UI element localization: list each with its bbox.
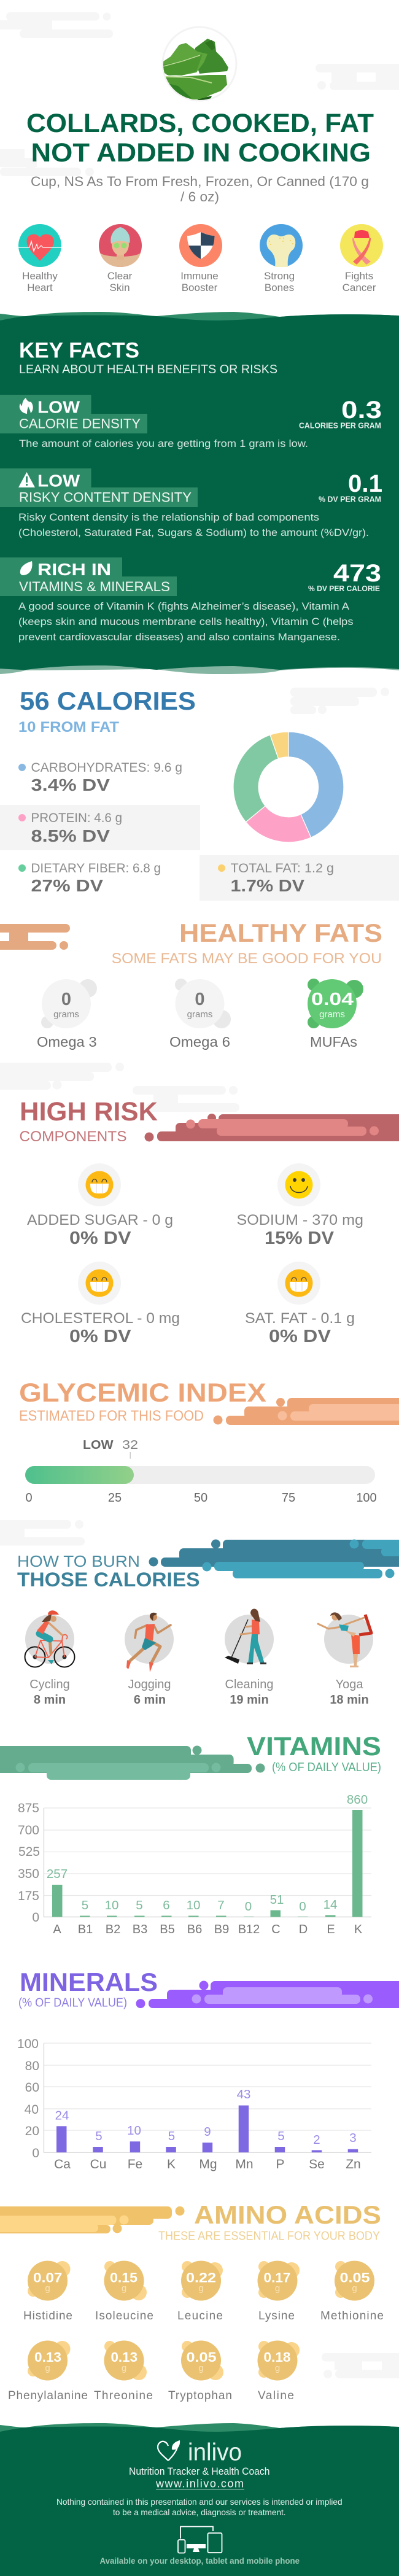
activity: yoga: Yoga [336,1678,363,1691]
glycemic gauge: 25 [108,1491,122,1505]
heading: amino acids: THESE ARE ESSENTIAL FOR YOUR BODY [158,2229,380,2243]
heading: healthy fats: HEALTHY FATS [179,918,382,947]
fact: low risky content density: LOW [37,471,80,490]
heading: how to burn those calories [17,1552,200,1591]
bar chart: minerals: 0 [32,2146,39,2160]
benefit: healthy heart: Heart [27,282,53,293]
decorative blob: burn [0,1520,85,1546]
bar chart: vitamins: E [327,1923,335,1936]
risk item: saturated fat [245,1262,355,1346]
decorative background blobs: header [0,12,399,176]
amino: tryptophan [168,2340,232,2402]
benefit: clear skin: Clear [107,270,133,282]
bar chart: minerals: 20 [25,2124,39,2138]
amino: isoleucine: 0.15 [110,2270,138,2285]
logo: inlivo: inlivo [188,2438,242,2465]
fat bubble: omega 3 [37,979,97,1050]
macro: protein: PROTEIN: 4.6 g [31,811,122,825]
risk item: sodium: 15% DV [265,1228,335,1248]
fact: rich in vitamins and minerals [0,557,381,643]
decorative banner: amino acids [0,2206,184,2233]
bar chart: vitamins: B3 [133,1923,147,1936]
amino: histidine [23,2260,72,2322]
activity: jogging: Jogging [128,1678,171,1691]
fact: low risky content density: RISKY CONTENT DENSITY [19,490,192,505]
fat bubble: omega 6: Omega 6 [169,1034,230,1050]
decorative banner: burn [149,1540,399,1578]
bar chart: minerals [17,2037,371,2171]
decorative blob: healthy fats [0,924,70,950]
fat bubble: MUFAs: 0.04 [311,990,354,1009]
bar chart: vitamins: 5 [82,1898,88,1912]
amino: methionine: g [352,2283,357,2294]
bar chart: minerals: Cu [90,2157,106,2171]
heading: glycemic index: GLYCEMIC INDEX [19,1378,266,1408]
bar chart: vitamins: 875 [18,1801,39,1815]
benefit: fights cancer [340,224,383,293]
heading: calories [18,686,196,735]
heading: amino acids: AMINO ACIDS [194,2200,381,2229]
bar chart: minerals: 3 [349,2131,357,2145]
amino: isoleucine: g [122,2283,126,2294]
heading: calories: 56 CALORIES [20,686,196,715]
bar chart: vitamins: 7 [217,1898,225,1912]
risk item: saturated fat: SAT. FAT - 0.1 g [245,1310,355,1327]
activity: cycling: Cycling [29,1678,70,1691]
title: NOT ADDED IN COOKING [31,138,371,168]
benefit: strong bones: Strong [264,270,295,282]
footer disclaimer: to be a medical advice, diagnosis or treatment. [113,2507,286,2517]
activity: yoga [318,1612,373,1707]
amino: leucine: 0.22 [186,2270,216,2285]
amino: phenylalanine [8,2340,88,2402]
bar chart: vitamins: 14 [323,1898,337,1912]
risk item: added sugar: ADDED SUGAR - 0 g [27,1212,173,1228]
amino: isoleucine: Isoleucine [95,2310,153,2322]
activity: cycling: 8 min [34,1693,66,1707]
macro: total fat: 1.7% DV [231,876,304,895]
heading: key facts [19,339,277,376]
footer tagline and link: Nutrition Tracker & Health Coach [129,2466,270,2477]
bar chart: vitamins: D [299,1923,308,1936]
risk item: sodium: SODIUM - 370 mg [237,1212,363,1228]
bar chart: minerals: Fe [128,2157,142,2171]
bar chart: minerals: Zn [346,2157,361,2171]
bar chart: vitamins: 51 [270,1893,284,1907]
fact: low calorie density: LOW [37,398,80,416]
fat bubble: omega 6 [169,979,231,1050]
activity: yoga: 18 min [330,1693,369,1707]
activity: jogging: 6 min [134,1693,166,1707]
fat bubble: omega 6: 0 [195,990,205,1009]
title [26,109,374,168]
risk item: added sugar [27,1163,173,1248]
serving size subtitle: / 6 oz) [180,189,219,204]
panel: footer background [0,2423,399,2576]
serving size subtitle [31,174,369,204]
bar chart: minerals: 5 [168,2129,175,2143]
footer tagline and link [129,2466,270,2490]
bar chart: vitamins: 10 [105,1898,118,1912]
bar chart: vitamins: 0 [245,1899,252,1914]
amino: methionine: 0.05 [340,2270,370,2285]
decorative blobs: high risk [0,1063,239,1112]
activity: cleaning [225,1608,274,1707]
bar chart: minerals: 9 [204,2125,211,2139]
amino: tryptophan: 0.05 [187,2349,216,2365]
amino: threonine: Threonine [94,2389,153,2402]
bar chart: vitamins: B9 [214,1923,229,1936]
bar chart: vitamins: 6 [163,1898,170,1912]
bar chart: minerals: Mn [235,2157,254,2171]
donut chart: calorie breakdown [233,732,344,842]
fact: rich in vitamins and minerals: prevent cardiovascular diseases) and also contains Manganese. [18,632,340,643]
amino: threonine: 0.13 [110,2349,138,2365]
bar chart: minerals: 43 [237,2087,250,2101]
bar chart: minerals: Ca [54,2157,71,2171]
bar chart: minerals: 60 [25,2081,39,2095]
glycemic gauge [25,1438,377,1505]
risk item: cholesterol [21,1262,180,1346]
decorative banner: minerals [136,1980,399,2008]
glycemic gauge: 32 [122,1438,138,1452]
macro: dietary fiber: DIETARY FIBER: 6.8 g [31,861,161,875]
fat bubble: MUFAs [308,979,363,1050]
fact: low calorie density: 0.3 [341,397,382,424]
macro: carbohydrates [18,761,182,794]
heading: minerals [18,1968,158,2010]
panel: key facts background [0,312,399,674]
bar chart: vitamins: B2 [106,1923,120,1936]
macro: total fat [200,855,399,901]
heading: vitamins [247,1732,381,1774]
amino: valine: 0.18 [264,2349,291,2365]
fat bubble: omega 3: 0 [61,990,71,1009]
logo: inlivo [158,2438,242,2465]
serving size subtitle: Cup, NS As To From Fresh, Frozen, Or Canned (170 g [31,174,369,189]
bar chart: vitamins: A [53,1923,61,1936]
icon: devices [178,2527,222,2553]
amino: threonine [94,2340,153,2402]
benefit: fights cancer: Cancer [343,282,376,293]
benefit: clear skin [99,224,142,293]
heading: high risk: HIGH RISK [20,1097,158,1127]
amino: lysine: Lysine [258,2310,295,2322]
amino: methionine: Methionine [320,2310,384,2322]
fat bubble: MUFAs: grams [319,1009,345,1020]
decorative banner: vitamins [0,1746,265,1780]
heading: key facts: LEARN ABOUT HEALTH BENEFITS OR RISKS [19,363,277,376]
heading: healthy fats: SOME FATS MAY BE GOOD FOR YOU [112,950,382,967]
heading: glycemic index: ESTIMATED FOR THIS FOOD [19,1408,204,1424]
glycemic gauge: 75 [282,1491,295,1505]
amino: tryptophan: Tryptophan [168,2389,232,2402]
risk item: saturated fat: 0% DV [269,1327,331,1346]
footer availability note: Available on your desktop, tablet and mobile phone [99,2556,300,2566]
amino: phenylalanine: Phenylalanine [8,2389,88,2402]
heading: vitamins: VITAMINS [247,1732,381,1761]
fact: low risky content density: Risky Content density is the relationship of bad components [18,512,319,523]
bar chart: vitamins: 860 [347,1793,368,1807]
heading: high risk [20,1097,158,1145]
heading: amino acids [158,2200,381,2243]
amino: phenylalanine: 0.13 [34,2349,61,2365]
bar chart: minerals: Se [309,2157,325,2171]
amino: valine: Valine [258,2389,294,2402]
fat bubble: omega 6: grams [187,1009,212,1020]
fact: rich in vitamins and minerals: VITAMINS & MINERALS [19,579,170,594]
decorative banner: high risk [145,1114,399,1142]
fat bubble: MUFAs: MUFAs [310,1034,357,1050]
benefit: healthy heart: Healthy [22,270,58,282]
macro: protein [0,805,200,850]
amino: isoleucine [95,2260,153,2322]
amino: leucine [177,2260,223,2322]
activity: jogging [125,1613,174,1707]
bar chart: vitamins: 700 [18,1823,39,1837]
macro: carbohydrates: 3.4% DV [31,775,110,794]
risk item: cholesterol: 0% DV [69,1327,131,1346]
bar chart: minerals: 80 [25,2059,39,2073]
benefit: fights cancer: Fights [345,270,373,282]
bar chart: vitamins: 5 [136,1898,143,1912]
fact: rich in vitamins and minerals: (keeps skin and mucous membrane cells healthy), Vitamin C (helps [18,616,354,627]
risk item: sodium [237,1163,363,1248]
title: COLLARDS, COOKED, FAT [26,109,374,138]
fact: rich in vitamins and minerals: 473 [333,560,381,587]
amino: tryptophan: g [198,2363,204,2373]
bar chart: vitamins [18,1793,371,1936]
bar chart: vitamins: 175 [18,1889,39,1903]
bar chart: vitamins: 10 [187,1898,200,1912]
bar chart: vitamins: 257 [47,1867,68,1881]
decorative blob: lower right [322,2353,399,2378]
heading: key facts: KEY FACTS [19,339,139,362]
fact: low risky content density: 0.1 [348,470,382,497]
benefit: immune booster [179,224,222,293]
heading: how to burn those calories: THOSE CALORIES [17,1569,200,1591]
heading: calories: 10 FROM FAT [18,719,119,735]
amino: phenylalanine: g [45,2363,50,2373]
amino: methionine [320,2260,384,2322]
activity: cleaning: 19 min [230,1693,269,1707]
bar chart: vitamins: B1 [78,1923,93,1936]
heading: high risk: COMPONENTS [20,1128,126,1145]
bar chart: vitamins: 350 [18,1867,39,1881]
fact: low calorie density: The amount of calories you are getting from 1 gram is low. [19,438,308,449]
glycemic gauge: 50 [194,1491,207,1505]
amino: lysine: 0.17 [264,2270,291,2285]
amino: histidine: Histidine [23,2310,72,2322]
bar chart: minerals: 24 [55,2108,69,2123]
fact: rich in vitamins and minerals: RICH IN [37,560,111,579]
heading: glycemic index [19,1378,266,1424]
risk item: added sugar: 0% DV [69,1228,131,1248]
amino: leucine: g [198,2283,204,2294]
heading: minerals: MINERALS [20,1968,158,1996]
decorative blob: calories [290,688,389,714]
risk item: cholesterol: CHOLESTEROL - 0 mg [21,1310,180,1327]
bar chart: vitamins: C [271,1923,281,1936]
bar chart: minerals: 40 [25,2103,39,2117]
heading: healthy fats [112,918,382,967]
bar chart: vitamins: B6 [187,1923,202,1936]
food photo: collard leaves in circle [163,27,236,101]
fact: low calorie density: CALORIE DENSITY [19,416,141,431]
amino: lysine [258,2260,300,2322]
fact: low risky content density [0,468,382,538]
benefit: strong bones: Bones [265,282,294,293]
benefit: healthy heart [18,224,61,293]
amino: leucine: Leucine [177,2310,223,2322]
bar chart: minerals: 5 [277,2129,285,2143]
macro: dietary fiber: 27% DV [31,876,103,895]
bar chart: minerals: Mg [199,2157,217,2171]
activity: cycling [25,1610,75,1707]
bar chart: minerals: 2 [313,2133,320,2147]
amino: valine [258,2340,300,2402]
activity: cleaning: Cleaning [225,1678,273,1691]
fat bubble: omega 3: Omega 3 [37,1034,97,1050]
fact: low risky content density: % DV PER GRAM [319,495,381,503]
fact: rich in vitamins and minerals: % DV PER CALORIE [308,584,380,593]
heading: vitamins: (% OF DAILY VALUE) [272,1761,381,1774]
bar chart: minerals: K [167,2157,176,2171]
fact: low calorie density: CALORIES PER GRAM [299,421,381,430]
fat bubble: omega 3: grams [53,1009,79,1020]
footer tagline and link: www.inlivo.com [155,2478,244,2490]
macro: carbohydrates: CARBOHYDRATES: 9.6 g [31,761,182,775]
fact: low calorie density [0,395,382,449]
heading: minerals: (% OF DAILY VALUE) [18,1996,127,2010]
bar chart: vitamins: B5 [160,1923,175,1936]
bar chart: vitamins: 0 [299,1899,306,1914]
amino: threonine: g [122,2363,126,2373]
bar chart: vitamins: 0 [32,1911,39,1925]
amino: histidine: g [45,2283,50,2294]
bar chart: minerals: 100 [17,2037,39,2051]
glycemic gauge: LOW [83,1438,114,1452]
fact: rich in vitamins and minerals: A good source of Vitamin K (fights Alzheimer’s disease), Vitamin A [18,601,349,612]
benefit: immune booster: Immune [180,270,219,282]
bar chart: vitamins: K [354,1923,363,1936]
benefit: strong bones [260,224,303,293]
benefit: immune booster: Booster [182,282,218,293]
glycemic gauge: 100 [356,1491,377,1505]
amino: histidine: 0.07 [33,2270,63,2285]
amino: lysine: g [275,2283,280,2294]
benefit: clear skin: Skin [109,282,130,293]
footer disclaimer [56,2497,343,2517]
bar chart: minerals: P [276,2157,285,2171]
heading: how to burn those calories: HOW TO BURN [17,1552,140,1570]
bar chart: vitamins: B12 [238,1923,260,1936]
fact: low risky content density: (Cholesterol, Saturated Fat, Sugars & Sodium) to the amount (%DV/gr). [18,527,369,538]
macro: total fat: TOTAL FAT: 1.2 g [231,861,334,875]
bar chart: minerals: 10 [127,2124,141,2138]
macro: protein: 8.5% DV [31,826,110,845]
footer disclaimer: Nothing contained in this presentation and our services is intended or implied [56,2497,343,2507]
macro: dietary fiber [18,861,161,895]
glycemic gauge: 0 [25,1491,33,1505]
amino: valine: g [275,2363,280,2373]
bar chart: vitamins: 525 [18,1845,40,1859]
decorative banner: glycemic index [214,1398,399,1425]
bar chart: minerals: 5 [95,2129,103,2143]
